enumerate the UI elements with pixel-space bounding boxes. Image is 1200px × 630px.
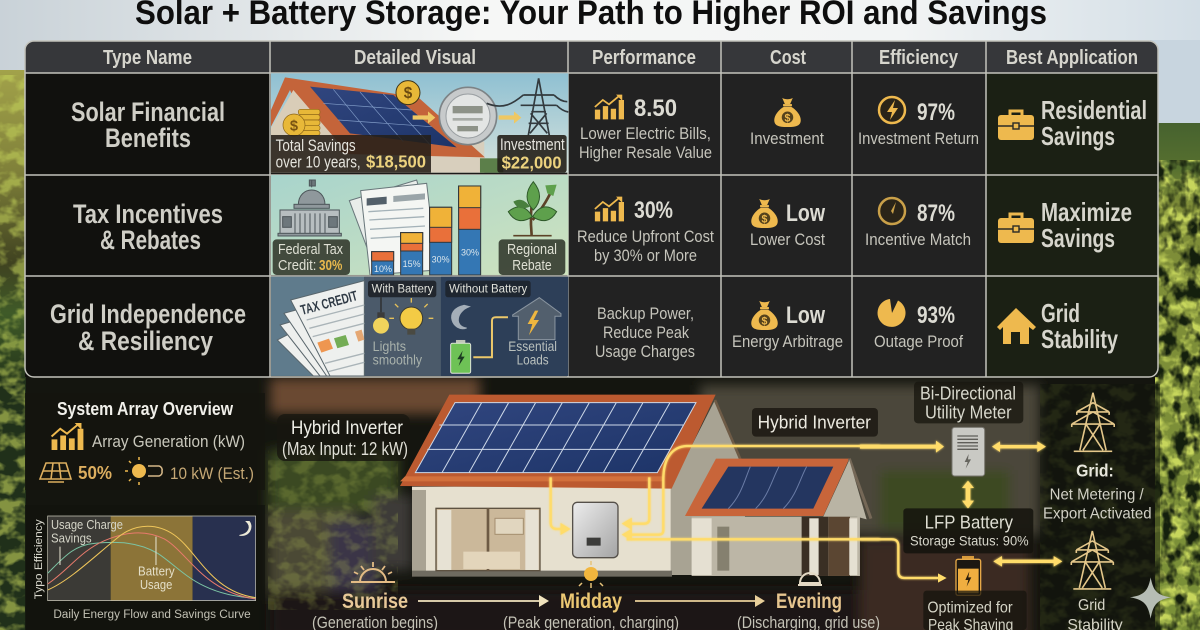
icon: house bbox=[513, 298, 561, 340]
cell: performance row 1: 8.50 bbox=[634, 95, 677, 122]
moon icon bbox=[239, 521, 251, 536]
cell: application row 2: Savings bbox=[1041, 223, 1115, 253]
caption: essential loads: Essential bbox=[508, 338, 557, 354]
row label: grid independence and resiliency: Grid Independence bbox=[50, 299, 246, 329]
visual: solar financial benefits bbox=[271, 73, 568, 173]
caption: total savings: over 10 years, bbox=[276, 153, 361, 172]
table header row: Detailed Visual bbox=[354, 47, 476, 69]
cell: efficiency row 3: 93% bbox=[917, 302, 955, 329]
cell: performance row 1 bbox=[579, 95, 712, 162]
caption: without battery: Without Battery bbox=[449, 282, 528, 296]
heading: system array overview: System Array Overview bbox=[57, 399, 234, 419]
solar array bbox=[415, 403, 696, 473]
cell: cost row 3: Low bbox=[786, 302, 825, 329]
icon: capitol building bbox=[278, 180, 341, 236]
icon: hanging bulb bbox=[373, 297, 389, 334]
stage: evening bbox=[737, 573, 880, 630]
visual: tax incentives and rebates: 30% bbox=[461, 248, 479, 258]
icon: solar panel bbox=[40, 463, 71, 482]
visual: grid independence bbox=[271, 277, 568, 376]
row label: tax incentives and rebates: Tax Incentives bbox=[73, 199, 223, 229]
row label: solar financial benefits: Solar Financial bbox=[71, 97, 225, 127]
chart: daily energy flow and savings curve bbox=[33, 516, 256, 621]
row label: grid independence and resiliency: & Resiliency bbox=[78, 326, 213, 356]
icon: lit bulb bbox=[389, 298, 433, 335]
caption: lights smoothly: smoothly bbox=[373, 352, 422, 368]
callout: hybrid inverter max input: Hybrid Inverter bbox=[291, 418, 404, 439]
cell: performance row 3 bbox=[595, 304, 695, 361]
visual: tax incentives and rebates: 10% bbox=[374, 264, 392, 274]
panel: system array overview bbox=[40, 399, 254, 485]
cell: cost row 1 bbox=[750, 98, 824, 148]
building and garden wash bbox=[268, 378, 1040, 630]
cell: application row 2: Maximize bbox=[1041, 197, 1132, 227]
annotation: battery usage: Usage bbox=[140, 578, 172, 592]
label: optimized for peak shaving: Optimized for bbox=[927, 600, 1013, 617]
caption: regional rebate: Rebate bbox=[512, 258, 552, 274]
chart caption: Daily Energy Flow and Savings Curve bbox=[53, 607, 251, 621]
annotation: usage charge savings: Savings bbox=[51, 531, 92, 545]
caption: essential loads: Loads bbox=[517, 352, 549, 368]
row label: tax incentives and rebates: & Rebates bbox=[100, 225, 201, 255]
text: array generation: Array Generation (kW) bbox=[92, 432, 245, 451]
caption: federal tax credit: 30% bbox=[319, 258, 342, 274]
visual: grid independence: TAX CREDIT bbox=[299, 287, 359, 318]
cell: cost row 2: Low bbox=[786, 200, 825, 227]
annotation: battery usage: Battery bbox=[138, 564, 175, 578]
carport bbox=[685, 459, 871, 576]
label: utility meter: Bi-Directional bbox=[920, 382, 1016, 403]
cell: efficiency row 1: Investment Return bbox=[858, 129, 979, 148]
stage: midday bbox=[503, 561, 679, 630]
axis label: Typo Efficiency bbox=[33, 519, 45, 599]
icon: battery bbox=[956, 556, 981, 595]
caption: lights smoothly: Lights bbox=[373, 338, 406, 354]
stage: midday: Midday bbox=[560, 590, 622, 613]
table header row: Performance bbox=[592, 47, 696, 69]
cell: application row 3: Grid bbox=[1041, 298, 1080, 328]
caption: investment: $22,000 bbox=[502, 153, 562, 173]
cell: performance row 2: Reduce Upfront Cost bbox=[577, 227, 714, 246]
cell: performance row 3: Backup Power, bbox=[597, 304, 694, 323]
cell: cost row 2 bbox=[750, 199, 825, 249]
table header row: Cost bbox=[770, 47, 806, 69]
cell: performance row 3: Reduce Peak bbox=[603, 323, 689, 342]
cell: application row 1 bbox=[998, 95, 1147, 151]
caption: total savings: $18,500 bbox=[366, 152, 426, 172]
stage: sunrise bbox=[312, 562, 438, 630]
icon: battery bbox=[451, 340, 471, 373]
label: grid net metering: Grid: bbox=[1076, 461, 1114, 481]
stage: evening: Evening bbox=[776, 590, 842, 613]
caption: regional rebate: Regional bbox=[507, 242, 557, 258]
cell: application row 3 bbox=[997, 298, 1118, 354]
cell: application row 3: Stability bbox=[1041, 324, 1118, 354]
visual: tax incentives and rebates: 30% bbox=[432, 254, 450, 264]
inverter unit bbox=[573, 502, 618, 558]
icon: grid tower upper bbox=[1072, 393, 1114, 451]
text: fifty percent: 50% bbox=[78, 463, 112, 483]
callout: hybrid inverter max input bbox=[277, 414, 410, 461]
icon: tax forms bbox=[349, 180, 440, 275]
callout: hybrid inverter max input: (Max Input: 12 kW) bbox=[282, 439, 408, 459]
cell: efficiency row 1 bbox=[858, 97, 979, 148]
callout: hybrid inverter: Hybrid Inverter bbox=[758, 412, 871, 433]
visual: tax incentives and rebates: 15% bbox=[403, 259, 421, 269]
label: lfp battery: Storage Status: 90% bbox=[910, 533, 1029, 548]
cell: application row 1: Residential bbox=[1041, 95, 1147, 125]
label: utility meter: Utility Meter bbox=[925, 401, 1012, 422]
callout: hybrid inverter bbox=[752, 408, 878, 437]
table header row bbox=[103, 47, 1138, 69]
caption: with battery: With Battery bbox=[372, 282, 434, 296]
row label: grid independence and resiliency bbox=[50, 299, 246, 356]
timeline: sunrise to evening bbox=[312, 561, 880, 630]
label: grid net metering: Export Activated bbox=[1043, 506, 1152, 523]
cell: efficiency row 3: Outage Proof bbox=[874, 332, 963, 351]
cell: cost row 2: Lower Cost bbox=[750, 230, 825, 249]
caption: investment: Investment bbox=[500, 135, 565, 154]
text: ten kilowatts: 10 kW (Est.) bbox=[170, 464, 254, 483]
label: grid stability: Grid bbox=[1078, 597, 1105, 614]
cell: performance row 3: Usage Charges bbox=[595, 342, 695, 361]
icon: generation chart bbox=[52, 423, 83, 450]
illustration: house with solar roof bbox=[400, 395, 880, 577]
cell: efficiency row 2: Incentive Match bbox=[865, 230, 971, 249]
icon: sun and cloud bbox=[125, 457, 162, 485]
cell: efficiency row 2: 87% bbox=[917, 200, 955, 227]
icon: meter bbox=[952, 427, 985, 476]
bar chart: incentive stack bbox=[372, 186, 481, 275]
icon: tax documents bbox=[277, 281, 364, 376]
icon: growing plant bbox=[508, 182, 557, 236]
arrows: meter connections bbox=[860, 441, 1062, 567]
icon: grid tower lower bbox=[1071, 531, 1113, 589]
cell: cost row 3 bbox=[732, 301, 843, 351]
row label: solar financial benefits bbox=[71, 97, 225, 153]
caption: total savings: Total Savings bbox=[276, 136, 356, 155]
cell: cost row 3: Energy Arbitrage bbox=[732, 332, 843, 351]
row label: solar financial benefits: Benefits bbox=[105, 123, 191, 153]
cell: cost row 1: Investment bbox=[750, 129, 824, 148]
cell: performance row 1: Higher Resale Value bbox=[579, 143, 712, 162]
cell: efficiency row 1: 97% bbox=[917, 99, 955, 126]
panel: meter, battery and grid flow bbox=[860, 382, 1171, 630]
arrow: sunrise to midday bbox=[418, 595, 549, 607]
label: lfp battery: LFP Battery bbox=[925, 512, 1014, 533]
cell: performance row 1: Lower Electric Bills, bbox=[580, 124, 711, 143]
visual: solar financial benefits: $ bbox=[290, 118, 298, 134]
arrow: battery to loads bbox=[473, 317, 508, 357]
window bbox=[436, 508, 540, 571]
stage: sunrise: Sunrise bbox=[342, 590, 408, 613]
icon: sparkle bbox=[1130, 577, 1171, 619]
visual: solar financial benefits: $ bbox=[404, 85, 413, 102]
cell: performance row 2: by 30% or More bbox=[594, 246, 697, 265]
energy flow lines bbox=[551, 446, 880, 539]
annotation: usage charge savings: Usage Charge bbox=[51, 518, 123, 532]
table header row: Best Application bbox=[1006, 47, 1138, 69]
cell: application row 2 bbox=[998, 197, 1132, 253]
arrow: midday to evening bbox=[635, 595, 765, 607]
label: grid net metering: Net Metering / bbox=[1050, 486, 1144, 503]
cell: performance row 2 bbox=[577, 197, 714, 265]
row label: tax incentives and rebates bbox=[73, 199, 223, 255]
cell: efficiency row 2 bbox=[865, 198, 971, 249]
table header row: Type Name bbox=[103, 47, 192, 69]
icon: moon bbox=[452, 305, 469, 329]
visual: tax incentives and rebates bbox=[271, 175, 568, 275]
panel: comparison table bbox=[25, 41, 1158, 377]
table header row: Efficiency bbox=[879, 47, 959, 69]
cell: application row 1: Savings bbox=[1041, 121, 1115, 151]
caption: federal tax credit: Federal Tax bbox=[278, 242, 344, 258]
caption: federal tax credit: Credit: bbox=[278, 258, 316, 274]
arrow: inverter to battery bbox=[860, 539, 938, 578]
cell: performance row 2: 30% bbox=[634, 197, 673, 224]
cell: efficiency row 3 bbox=[874, 299, 963, 351]
